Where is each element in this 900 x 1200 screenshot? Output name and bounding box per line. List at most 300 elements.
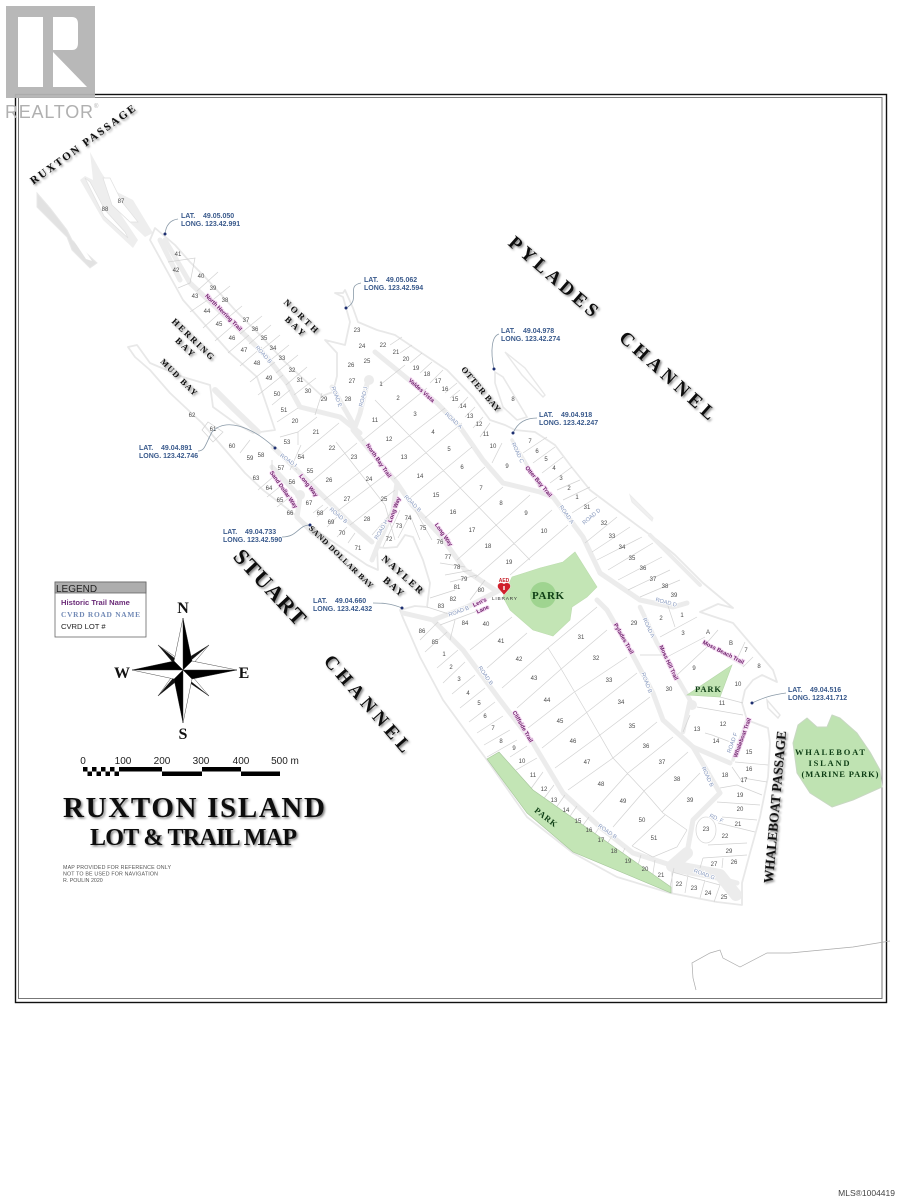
lot numbers: 24	[359, 344, 366, 350]
lot numbers: 39	[671, 593, 678, 599]
lot numbers: 32	[601, 521, 608, 527]
road name labels: ROAD B	[596, 823, 618, 841]
lot numbers: 31	[297, 378, 304, 384]
lot numbers: A	[706, 630, 710, 636]
lot numbers: 42	[516, 657, 523, 663]
lot numbers: 44	[204, 309, 211, 315]
lot numbers: 6	[483, 714, 487, 720]
water and bay labels: RUXTON PASSAGE	[28, 103, 138, 187]
lot numbers: 38	[674, 777, 681, 783]
lot numbers: 30	[305, 389, 312, 395]
lot numbers: 28	[364, 517, 371, 523]
lot numbers: 12	[476, 422, 483, 428]
road name labels: ROAD E	[330, 386, 343, 408]
AED and library marker: LIBRARY	[492, 596, 518, 602]
lot numbers: 10	[490, 444, 497, 450]
small park	[687, 665, 732, 697]
road name labels: RD. F	[708, 813, 724, 825]
lot numbers: 48	[254, 361, 261, 367]
lot numbers: 43	[192, 294, 199, 300]
lot numbers: 12	[541, 787, 548, 793]
scale bar: 0	[80, 756, 86, 767]
lot numbers: 24	[705, 891, 712, 897]
lot numbers: 1	[680, 613, 684, 619]
lot numbers: 41	[498, 639, 505, 645]
lot numbers: 8	[499, 501, 503, 507]
lot numbers: 78	[454, 565, 461, 571]
historic trail labels: Moss Beach Trail	[701, 640, 745, 666]
park labels	[532, 590, 879, 829]
historic trail labels: Cliffside Trail	[511, 710, 534, 744]
coordinate callouts: LAT. 49.04.516	[788, 687, 841, 694]
road name labels: ROAD B	[640, 672, 653, 694]
lot numbers: 10	[519, 759, 526, 765]
lot numbers: 70	[339, 531, 346, 537]
lot numbers: 31	[584, 505, 591, 511]
lot numbers: 28	[345, 397, 352, 403]
road name labels: ROAD J	[358, 386, 370, 408]
disclaimer: NOT TO BE USED FOR NAVIGATION	[63, 872, 158, 878]
lot numbers: 51	[651, 836, 658, 842]
road name labels: ROAD A	[557, 505, 575, 526]
road name labels: ROAD B	[402, 494, 422, 514]
lot numbers: 15	[452, 397, 459, 403]
map title: RUXTON ISLAND	[63, 792, 325, 824]
offshore islets	[37, 152, 780, 718]
lot numbers: 29	[631, 621, 638, 627]
coordinate callouts: LAT. 49.04.918	[539, 412, 592, 419]
lot numbers: 27	[711, 862, 718, 868]
road name labels: ROAD H	[374, 519, 390, 541]
lot numbers: 16	[442, 387, 449, 393]
lot numbers: 9	[505, 464, 509, 470]
lot numbers: 49	[266, 376, 273, 382]
lot numbers: 23	[354, 328, 361, 334]
water and bay labels: PYLADES	[504, 232, 602, 322]
lot numbers: 39	[687, 798, 694, 804]
island land	[128, 228, 777, 905]
historic trail labels: Long Way	[388, 496, 403, 523]
lot numbers: 22	[380, 343, 387, 349]
lot numbers: 47	[584, 760, 591, 766]
historic trail labels: North Bay Trail	[364, 443, 392, 479]
lot numbers: 11	[530, 773, 537, 779]
lot numbers: 40	[198, 274, 205, 280]
lot numbers: 40	[483, 622, 490, 628]
lot numbers: 73	[396, 524, 403, 530]
lot numbers: 45	[216, 322, 223, 328]
lot numbers: 29	[726, 849, 733, 855]
map title: LOT & TRAIL MAP	[90, 825, 297, 851]
lot numbers: 80	[478, 588, 485, 594]
lot numbers: 16	[746, 767, 753, 773]
lot numbers: 7	[744, 648, 748, 654]
compass rose: N	[177, 600, 189, 617]
water and bay labels: BAY	[173, 335, 197, 359]
park labels: PARK	[533, 805, 560, 829]
lot numbers: 19	[625, 859, 632, 865]
road name labels: ROAD A	[641, 617, 655, 639]
compass rose	[114, 600, 249, 743]
road name labels: ROAD I	[278, 453, 298, 469]
lot numbers: 15	[433, 493, 440, 499]
lot numbers: 19	[737, 793, 744, 799]
lot numbers: 79	[461, 577, 468, 583]
lot numbers: 14	[417, 474, 424, 480]
lot numbers: 35	[261, 336, 268, 342]
lot numbers: 72	[386, 537, 393, 543]
lot numbers: 37	[650, 577, 657, 583]
lot numbers: 8	[511, 397, 515, 403]
road name labels: ROAD A	[443, 412, 463, 430]
lot numbers: 31	[578, 635, 585, 641]
historic trail labels: Otter Bay Trail	[523, 465, 553, 499]
map frame	[16, 94, 886, 1002]
historic trail labels: Whaleboat Trail	[733, 717, 753, 758]
lot numbers: 64	[266, 486, 273, 492]
lot numbers: 61	[210, 427, 217, 433]
lot numbers: 50	[274, 392, 281, 398]
lot numbers: 81	[454, 585, 461, 591]
lot numbers: 16	[450, 510, 457, 516]
coordinate callouts: LAT. 49.05.050	[181, 213, 234, 220]
lot numbers: 25	[721, 895, 728, 901]
lot numbers: 7	[479, 486, 483, 492]
lot numbers: 36	[643, 744, 650, 750]
disclaimer: R. POULIN 2020	[63, 878, 103, 884]
lot numbers: 18	[611, 849, 618, 855]
lot numbers: 22	[676, 882, 683, 888]
lot numbers: 48	[598, 782, 605, 788]
lot numbers: 58	[258, 453, 265, 459]
water and bay labels: MUD BAY	[158, 356, 200, 398]
lot numbers: 54	[298, 455, 305, 461]
lot numbers: 2	[396, 396, 400, 402]
historic trail labels: Pylades Trail	[612, 623, 634, 656]
lot numbers: 77	[445, 555, 452, 561]
lot numbers: 34	[618, 700, 625, 706]
lot numbers: 25	[381, 497, 388, 503]
lot numbers: 20	[292, 419, 299, 425]
road name labels	[254, 345, 740, 882]
water and bay labels: BAY	[283, 314, 307, 338]
lot numbers: 45	[557, 719, 564, 725]
lot numbers: 19	[506, 560, 513, 566]
lot numbers: 13	[694, 727, 701, 733]
lot numbers: 86	[419, 629, 426, 635]
park labels: (MARINE PARK)	[802, 769, 879, 779]
park labels: PARK	[532, 590, 564, 602]
compass rose: S	[179, 726, 188, 743]
coordinate callouts	[139, 213, 847, 704]
lot numbers: B	[729, 641, 733, 647]
lot boundary lines	[168, 258, 768, 902]
lot numbers: 46	[229, 336, 236, 342]
historic trail labels: Moss Hill Trail	[657, 645, 679, 682]
disclaimer	[63, 865, 171, 884]
scale bar: 400	[233, 756, 250, 767]
lot numbers: 2	[567, 486, 571, 492]
lot numbers: 65	[277, 498, 284, 504]
scale bar: 500 m	[271, 756, 299, 767]
lot numbers: 62	[189, 413, 196, 419]
lot numbers: 7	[491, 726, 495, 732]
historic trail labels	[203, 293, 753, 758]
lot numbers: 19	[413, 366, 420, 372]
lot numbers: 8	[757, 664, 761, 670]
water and bay labels: CHANNEL	[615, 327, 719, 425]
REALTOR logo watermark: ®	[94, 103, 99, 110]
historic trail labels: Long Way	[297, 474, 319, 499]
lot numbers: 12	[386, 437, 393, 443]
lot numbers: 27	[349, 379, 356, 385]
road name labels: ROAD B	[700, 766, 714, 788]
lot numbers: 17	[435, 379, 442, 385]
coordinate callouts: LONG. 123.42.746	[139, 453, 198, 460]
water and bay labels: SAND DOLLAR BAY	[307, 524, 375, 590]
lot numbers: 37	[243, 318, 250, 324]
MLS number: MLS®1004419	[838, 1188, 895, 1198]
REALTOR logo watermark: REALTOR	[5, 102, 93, 122]
lot numbers: 11	[719, 701, 726, 707]
road name labels: ROAD C	[510, 442, 524, 464]
lot numbers: 37	[659, 760, 666, 766]
lot numbers: 34	[619, 545, 626, 551]
Whaleboat Island	[793, 715, 882, 807]
lot numbers: 71	[355, 546, 362, 552]
water and bay labels: NORTH	[282, 297, 320, 335]
lot numbers: 20	[403, 357, 410, 363]
lot numbers: 75	[420, 526, 427, 532]
lot numbers: 14	[460, 404, 467, 410]
disclaimer: MAP PROVIDED FOR REFERENCE ONLY	[63, 865, 171, 871]
lot numbers: 84	[462, 621, 469, 627]
lot numbers: 55	[307, 469, 314, 475]
lot numbers: 67	[306, 501, 313, 507]
lot numbers: 11	[483, 432, 490, 438]
park labels: WHALEBOAT	[795, 747, 865, 757]
lot numbers: 33	[279, 356, 286, 362]
roads	[160, 240, 747, 895]
lot numbers: 13	[401, 455, 408, 461]
water and bay labels: HERRING	[170, 316, 216, 362]
lot numbers: 4	[466, 691, 470, 697]
lot numbers: 17	[469, 528, 476, 534]
lot numbers: 6	[460, 465, 464, 471]
central park inner patch	[530, 582, 556, 608]
lot numbers: 50	[639, 818, 646, 824]
lot numbers: 41	[175, 252, 182, 258]
lot numbers: 69	[328, 520, 335, 526]
historic trail labels: Lane	[476, 605, 490, 615]
coordinate callouts: LONG. 123.41.712	[788, 695, 847, 702]
lot numbers: 9	[692, 666, 696, 672]
lot numbers: 5	[477, 701, 481, 707]
lot numbers: 82	[450, 597, 457, 603]
park labels: PARK	[695, 684, 721, 694]
park labels: ISLAND	[808, 758, 850, 768]
legend	[55, 582, 146, 637]
coordinate callouts: LONG. 123.42.991	[181, 221, 240, 228]
lot numbers: 87	[118, 199, 125, 205]
compass rose: W	[114, 665, 130, 682]
lot numbers: 15	[746, 750, 753, 756]
map title	[63, 792, 325, 851]
lot numbers: 47	[241, 348, 248, 354]
coordinate callouts: LAT. 49.05.062	[364, 277, 417, 284]
lot numbers: 57	[278, 466, 285, 472]
lot numbers: 66	[287, 511, 294, 517]
lot numbers: 8	[499, 739, 503, 745]
legend: CVRD LOT #	[61, 622, 106, 631]
lot numbers: 24	[366, 477, 373, 483]
lot numbers: 32	[593, 656, 600, 662]
lot numbers: 15	[575, 819, 582, 825]
water and bay labels: BAY	[380, 575, 406, 600]
lot numbers: 38	[662, 584, 669, 590]
coordinate callouts: LONG. 123.42.590	[223, 537, 282, 544]
water and bay labels: NAYLER	[379, 554, 426, 597]
lot numbers: 21	[393, 350, 400, 356]
lot numbers: 83	[438, 604, 445, 610]
scale bar: 300	[193, 756, 210, 767]
lot numbers: 3	[559, 476, 563, 482]
lot numbers: 44	[544, 698, 551, 704]
lot numbers: 6	[535, 449, 539, 455]
lot numbers: 13	[551, 798, 558, 804]
lot numbers: 1	[442, 652, 446, 658]
lot numbers: 4	[431, 430, 435, 436]
lot numbers: 27	[344, 497, 351, 503]
lot numbers: 3	[681, 631, 685, 637]
lot numbers	[102, 199, 761, 901]
lot numbers: 68	[317, 511, 324, 517]
road name labels: ROAD G	[693, 868, 715, 882]
lot numbers: 23	[351, 455, 358, 461]
lot numbers: 51	[281, 408, 288, 414]
lot numbers: 35	[629, 556, 636, 562]
scale bar: 200	[154, 756, 171, 767]
lot numbers: 26	[348, 363, 355, 369]
coordinate callouts: LAT. 49.04.660	[313, 598, 366, 605]
lot numbers: 76	[437, 540, 444, 546]
road name labels: ROAD B	[476, 665, 494, 687]
lot numbers: 60	[229, 444, 236, 450]
lot numbers: 16	[586, 828, 593, 834]
lot numbers: 53	[284, 440, 291, 446]
lot numbers: 59	[247, 456, 254, 462]
lot numbers: 21	[658, 873, 665, 879]
lot numbers: 18	[722, 773, 729, 779]
lot numbers: 10	[541, 529, 548, 535]
lot numbers: 88	[102, 207, 109, 213]
water and bay labels: CHANNEL	[319, 651, 415, 757]
REALTOR logo watermark	[5, 6, 99, 122]
road name labels: ROAD B	[328, 507, 348, 525]
lot numbers: 11	[372, 418, 379, 424]
lot numbers: 43	[531, 676, 538, 682]
water and bay labels: WHALEBOAT PASSAGE	[761, 730, 789, 884]
lot numbers: 42	[173, 268, 180, 274]
lot numbers: 10	[735, 682, 742, 688]
lot numbers: 13	[467, 414, 474, 420]
lot numbers: 46	[570, 739, 577, 745]
coordinate callouts: LONG. 123.42.594	[364, 285, 423, 292]
lot numbers: 2	[659, 616, 663, 622]
lot numbers: 85	[432, 640, 439, 646]
coordinate callouts: LAT. 49.04.733	[223, 529, 276, 536]
lot numbers: 17	[741, 778, 748, 784]
lot numbers: 9	[512, 746, 516, 752]
lot numbers: 26	[326, 478, 333, 484]
road name labels: ROAD B	[254, 345, 273, 365]
lot numbers: 17	[598, 838, 605, 844]
lot numbers: 3	[457, 677, 461, 683]
lot 23 oval	[696, 817, 716, 843]
lot numbers: 32	[289, 368, 296, 374]
coordinate callouts: LONG. 123.42.274	[501, 336, 560, 343]
lot numbers: 23	[691, 886, 698, 892]
road name labels: ROAD D	[582, 508, 602, 526]
lot numbers: 35	[629, 724, 636, 730]
historic trail labels: North Herring Trail	[203, 293, 243, 333]
coordinate callouts: LONG. 123.42.432	[313, 606, 372, 613]
water and bay labels: OTTER BAY	[459, 364, 503, 414]
coordinate callouts: LAT. 49.04.891	[139, 445, 192, 452]
lot numbers: 14	[713, 739, 720, 745]
legend: CVRD ROAD NAME	[61, 610, 140, 619]
contour line bottom right	[692, 941, 890, 990]
water and bay labels: STUART	[228, 544, 312, 630]
legend: Historic Trail Name	[61, 598, 130, 607]
lot numbers: 36	[640, 566, 647, 572]
lot numbers: 33	[606, 678, 613, 684]
lot numbers: 21	[313, 430, 320, 436]
coordinate callouts: LAT. 49.04.978	[501, 328, 554, 335]
lot numbers: 33	[609, 534, 616, 540]
lot numbers: 20	[737, 807, 744, 813]
lot numbers: 4	[552, 466, 556, 472]
lot numbers: 18	[424, 372, 431, 378]
lot numbers: 36	[252, 327, 259, 333]
lot numbers: 34	[270, 346, 277, 352]
AED and library marker: AED	[499, 578, 510, 584]
lot numbers: 5	[544, 457, 548, 463]
lot numbers: 49	[620, 799, 627, 805]
historic trail labels: Sand Dollar Way	[268, 470, 299, 510]
lot numbers: 63	[253, 476, 260, 482]
historic trail labels: Valdes Vista	[407, 378, 436, 405]
legend: LEGEND	[56, 584, 97, 595]
AED and library marker	[492, 578, 518, 602]
south shore park	[487, 752, 671, 893]
lot numbers: 3	[413, 412, 417, 418]
lot numbers: 22	[722, 834, 729, 840]
lot numbers: 26	[731, 860, 738, 866]
lot numbers: 7	[528, 439, 532, 445]
historic trail labels: Len's	[472, 597, 488, 609]
scale bar	[80, 756, 299, 776]
lot numbers: 39	[210, 286, 217, 292]
water and bay labels	[28, 103, 789, 884]
lot numbers: 18	[485, 544, 492, 550]
lot numbers: 9	[524, 511, 528, 517]
lot numbers: 30	[666, 687, 673, 693]
lot numbers: 23	[703, 827, 710, 833]
parks	[487, 552, 882, 893]
lot numbers: 56	[289, 480, 296, 486]
road name labels: ROAD D	[655, 597, 677, 609]
